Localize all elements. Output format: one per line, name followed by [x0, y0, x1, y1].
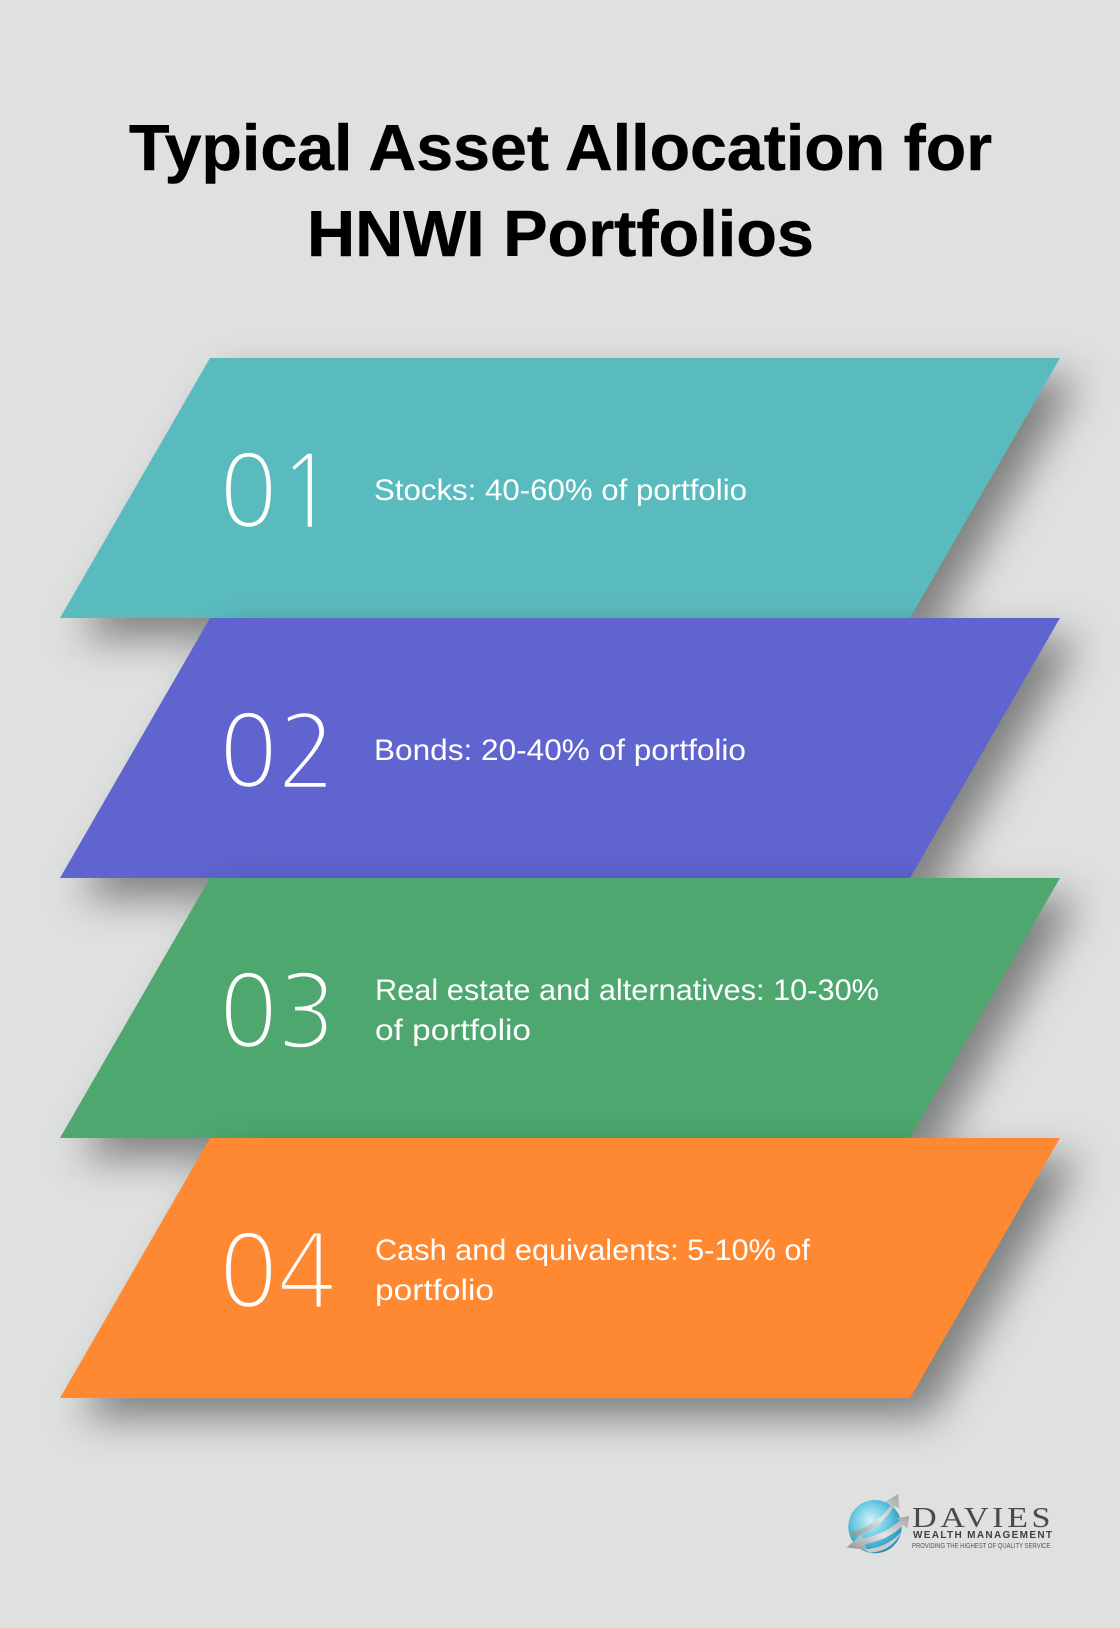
icon: globe with arrows [847, 1494, 909, 1553]
panel: 01 stocks: 01 [219, 442, 336, 542]
logo: Davies Wealth Management [847, 1494, 1054, 1553]
title [129, 111, 992, 270]
panel: 01 stocks: Stocks: 40-60% of portfolio [374, 474, 747, 507]
panel: 04 cash and equivalents: 04 [219, 1222, 336, 1322]
panel: 04 cash and equivalents: portfolio [375, 1274, 494, 1307]
logo: Davies Wealth Management: WEALTH MANAGEMENT [913, 1530, 1052, 1541]
panel: 02 bonds: 02 [219, 702, 336, 802]
title: Typical Asset Allocation for [129, 111, 992, 184]
panel: 04 cash and equivalents [60, 1138, 1060, 1398]
panel: 03 real estate and alternatives: of portfolio [375, 1014, 531, 1047]
title: HNWI Portfolios [307, 197, 814, 270]
panel: 03 real estate and alternatives [60, 878, 1060, 1138]
panel: 04 cash and equivalents: Cash and equivalents: 5-10% of [375, 1234, 811, 1267]
panel: 01 stocks [60, 358, 1060, 618]
logo: Davies Wealth Management: DAVIES [912, 1502, 1054, 1534]
panel: 02 bonds [60, 618, 1060, 878]
panel: 03 real estate and alternatives: Real estate and alternatives: 10-30% [375, 974, 879, 1007]
logo: Davies Wealth Management: PROVIDING THE HIGHEST OF QUALITY SERVICE. [912, 1543, 1052, 1550]
panel: 03 real estate and alternatives: 03 [219, 962, 336, 1062]
panel: 02 bonds: Bonds: 20-40% of portfolio [374, 734, 746, 767]
